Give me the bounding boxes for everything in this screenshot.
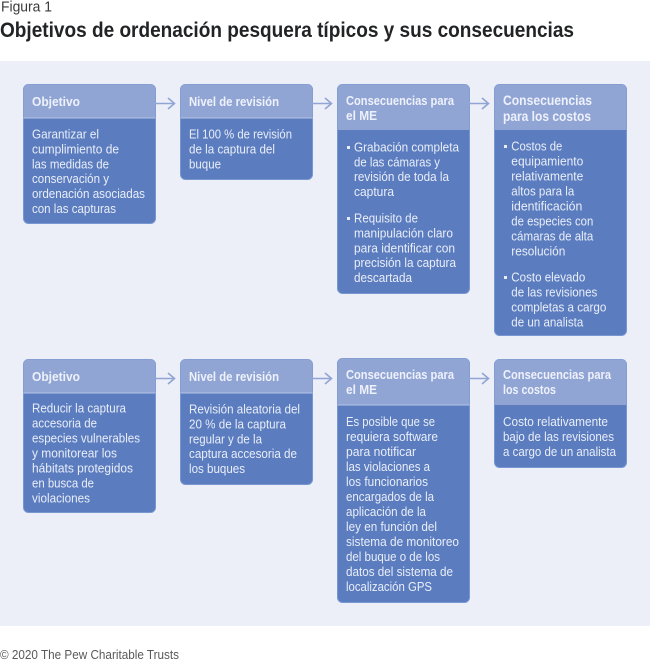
text: nivel body: regular y de la	[189, 432, 262, 446]
row 2: consecuencias ME card	[338, 358, 470, 602]
text: objetivo body: con las capturas	[32, 202, 116, 216]
text: costos bullets: cámaras de alta	[511, 230, 593, 244]
heading: consecuencias costos	[503, 92, 592, 124]
row 2: objetivo card	[24, 360, 156, 512]
text: ME body: encargados de la	[346, 490, 434, 504]
text: objetivo body: accesoria de	[32, 416, 97, 430]
heading: consecuencias ME: el ME	[346, 108, 377, 123]
text: objetivo body: Reducir la captura	[32, 402, 126, 416]
arrow: row 2, nivel to ME	[312, 373, 332, 384]
text: nivel body: 20 % de la captura	[189, 418, 286, 432]
text: costos bullets: equipamiento	[511, 154, 583, 168]
text: costos body	[503, 415, 616, 459]
text: costos bullets: de especies con	[511, 214, 593, 228]
text: ME bullets: precisión la captura	[354, 256, 456, 270]
text: ME bullets: Grabación completa	[354, 140, 459, 154]
text: costos bullets	[504, 140, 606, 330]
text: nivel body	[189, 402, 300, 476]
arrow: row 1, objetivo to nivel	[156, 98, 174, 109]
text: ME body: aplicación de la	[346, 505, 426, 519]
heading: nivel de revisión: Nivel de revisión	[189, 94, 279, 109]
text: ME body: sistema de monitoreo	[346, 535, 459, 549]
text: ME body: del buque o de los	[346, 550, 440, 564]
text: ME bullets: manipulación claro	[354, 226, 453, 240]
heading: consecuencias ME: Consecuencias para	[346, 367, 455, 382]
heading: objetivo: Objetivo	[32, 94, 80, 109]
heading: nivel de revisión: Nivel de revisión	[189, 369, 279, 384]
text: nivel body: El 100 % de revisión	[189, 128, 292, 142]
arrow: row 2, ME to costos	[470, 373, 488, 384]
title: Objetivos de ordenación pesquera típicos y sus consecuencias	[0, 19, 574, 42]
heading: consecuencias costos	[503, 367, 612, 397]
text: ME body: los funcionarios	[346, 475, 428, 489]
text: objetivo body: Garantizar el	[32, 128, 99, 142]
text: ME bullets: de las cámaras y	[354, 156, 441, 170]
text: costos bullets: relativamente	[511, 170, 583, 184]
heading: objetivo: Objetivo	[32, 369, 80, 384]
heading: consecuencias costos: Consecuencias	[503, 92, 592, 108]
text: objetivo body: y monitorear los	[32, 446, 117, 460]
text: objetivo body: hábitats protegidos	[32, 462, 133, 476]
text: ME body: datos del sistema de	[346, 565, 453, 579]
text: objetivo body: violaciones	[32, 492, 90, 506]
text: ME body: las violaciones a	[346, 460, 430, 474]
arrow: row 1, ME to costos	[470, 98, 488, 109]
heading: consecuencias costos: para los costos	[503, 108, 591, 124]
text: costos bullets: Costos de	[511, 140, 562, 154]
text: ME body: localización GPS	[346, 580, 432, 594]
text: ME bullets: revisión de toda la	[354, 170, 449, 184]
row 1: nivel de revisión card	[180, 84, 312, 180]
text: costos bullets: identificación	[511, 200, 582, 214]
text: nivel body: buque	[189, 158, 221, 172]
text: ME bullets: Requisito de	[354, 212, 418, 226]
text: nivel body	[189, 128, 292, 172]
text: objetivo body	[32, 402, 140, 506]
text: costos bullets: de las revisiones	[511, 286, 597, 300]
heading: consecuencias ME	[346, 367, 455, 397]
text: nivel body: Revisión aleatoria del	[189, 402, 300, 416]
heading: consecuencias costos: los costos	[503, 382, 556, 397]
row 1: objetivo card	[24, 84, 156, 224]
text: ME body: para notificar	[346, 445, 416, 459]
text: ME bullets: para identificar con	[354, 242, 455, 256]
text: ME bullets	[347, 140, 459, 285]
text: nivel body: los buques	[189, 462, 245, 476]
heading: consecuencias ME: el ME	[346, 382, 377, 397]
text: nivel body: captura accesoria de	[189, 447, 297, 461]
text: costos body: a cargo de un analista	[503, 445, 616, 459]
text: ME body: requiera software	[346, 430, 438, 444]
arrow: row 1, nivel to ME	[312, 98, 332, 109]
text: ME body	[346, 415, 459, 594]
text: costos bullets: completas a cargo	[511, 300, 606, 314]
text: costos bullets: altos para la	[511, 184, 574, 198]
row 2: nivel de revisión card	[180, 360, 312, 484]
text: objetivo body: cumplimiento de	[32, 142, 119, 156]
text: costos body: bajo de las revisiones	[503, 430, 614, 444]
text: objetivo body: en busca de	[32, 476, 94, 490]
text: objetivo body: ordenación asociadas	[32, 187, 145, 201]
text: objetivo body: conservación y	[32, 172, 110, 186]
text: costos bullets: resolución	[511, 244, 565, 258]
text: objetivo body: las medidas de	[32, 158, 109, 172]
heading: consecuencias ME: Consecuencias para	[346, 93, 455, 108]
text: ME body: Es posible que se	[346, 415, 435, 429]
text: objetivo body	[32, 128, 145, 216]
text: costos body: Costo relativamente	[503, 415, 608, 429]
text: ME bullets: descartada	[354, 271, 412, 285]
row 1: consecuencias costos card	[494, 84, 626, 336]
arrow: row 2, objetivo to nivel	[156, 373, 174, 384]
text: costos bullets: de un analista	[511, 316, 583, 330]
text: costos bullets: Costo elevado	[511, 270, 585, 284]
row 2: consecuencias costos card	[494, 360, 626, 468]
text: nivel body: de la captura del	[189, 142, 275, 156]
heading: consecuencias costos: Consecuencias para	[503, 367, 612, 382]
text: ME bullets: captura	[354, 185, 394, 199]
text: objetivo body: especies vulnerables	[32, 432, 140, 446]
heading: consecuencias ME	[346, 93, 455, 123]
text: ME body: ley en función del	[346, 520, 437, 534]
row 1: consecuencias ME card	[338, 84, 470, 294]
